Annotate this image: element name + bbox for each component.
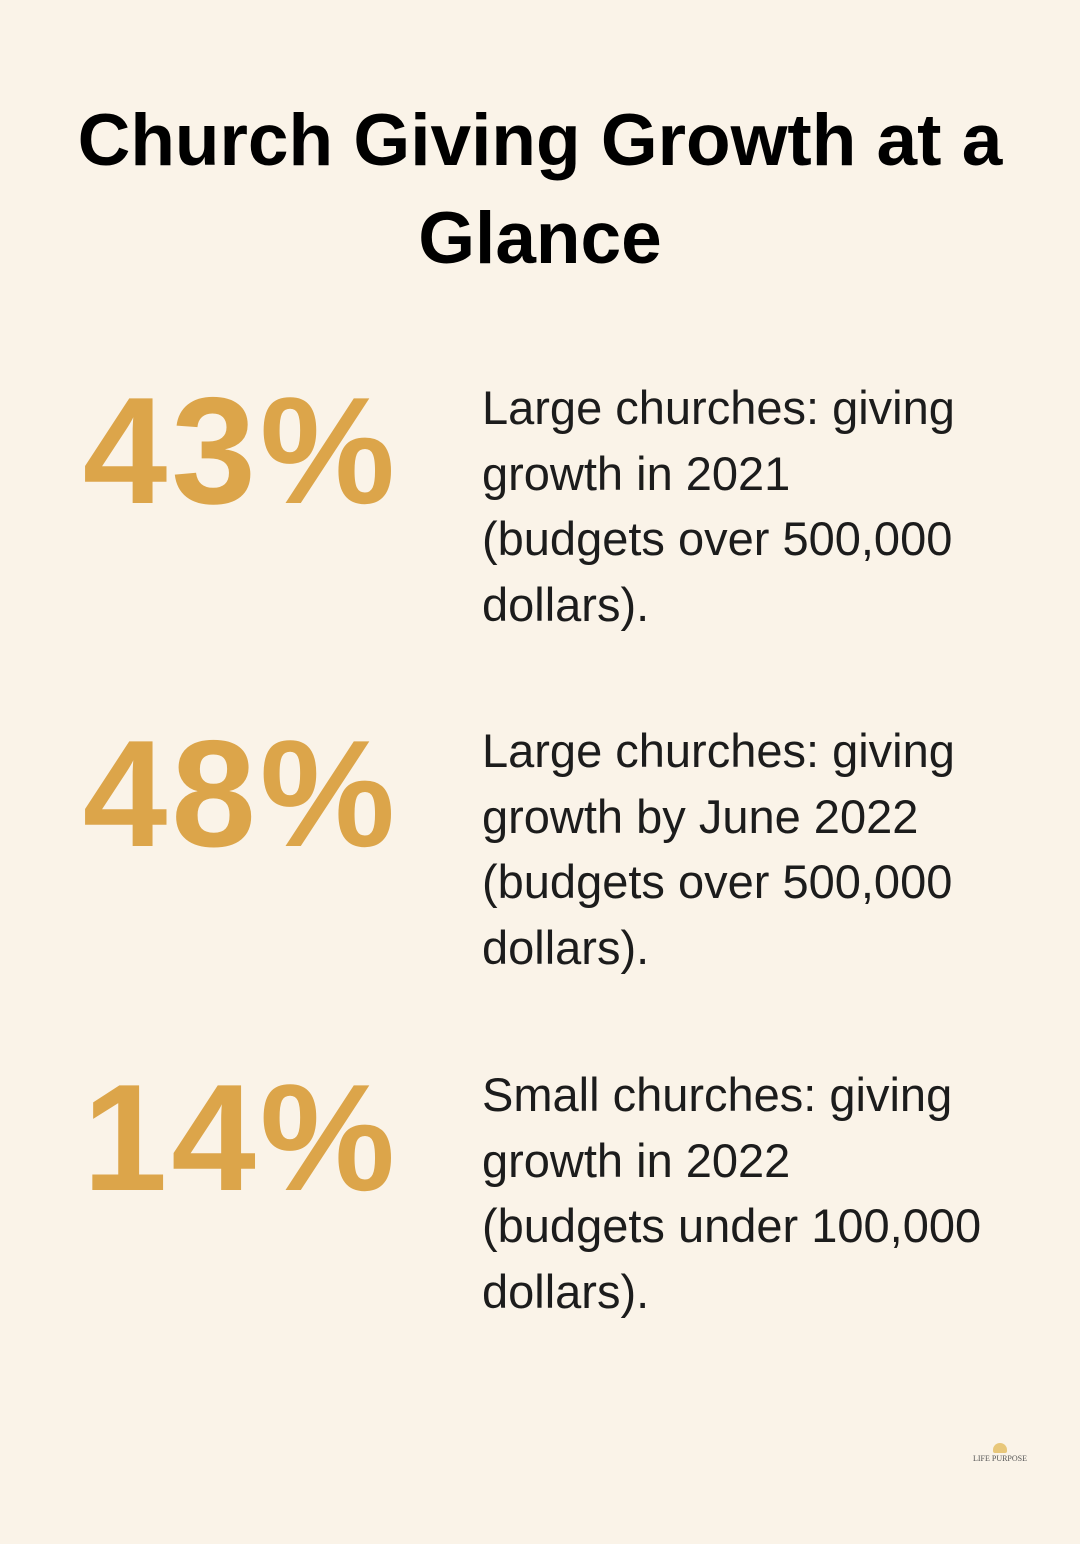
logo xyxy=(973,1443,1027,1463)
description 48%: Large churches: giving xyxy=(482,724,955,777)
description 48%: growth by June 2022 xyxy=(482,790,918,842)
description 14%: dollars). xyxy=(482,1264,649,1318)
title xyxy=(78,100,1003,279)
description 14%: (budgets under 100,000 xyxy=(482,1199,981,1252)
description 43%: dollars). xyxy=(482,578,649,630)
description 14% xyxy=(482,1068,981,1318)
description 43%: growth in 2021 xyxy=(482,446,790,500)
description 14%: Small churches: giving xyxy=(482,1068,952,1121)
stat: 43% xyxy=(83,366,955,631)
title: Glance xyxy=(418,198,662,279)
logo text: LIFE PURPOSE xyxy=(973,1454,1027,1463)
description 48%: dollars). xyxy=(482,920,649,974)
description 43% xyxy=(482,381,955,631)
description 48%: (budgets over 500,000 xyxy=(482,855,952,908)
description 14%: growth in 2022 xyxy=(482,1134,790,1186)
description 43%: (budgets over 500,000 xyxy=(482,512,952,565)
icon: tree xyxy=(993,1443,1007,1453)
number 48%: 48% xyxy=(83,709,399,879)
description 43%: Large churches: giving xyxy=(482,381,955,434)
stat: 48% xyxy=(83,709,955,974)
number 43%: 43% xyxy=(83,366,399,536)
number 14%: 14% xyxy=(83,1053,399,1223)
stat: 14% xyxy=(83,1053,981,1318)
description 48% xyxy=(482,724,955,974)
title: Church Giving Growth at a xyxy=(78,100,1002,181)
